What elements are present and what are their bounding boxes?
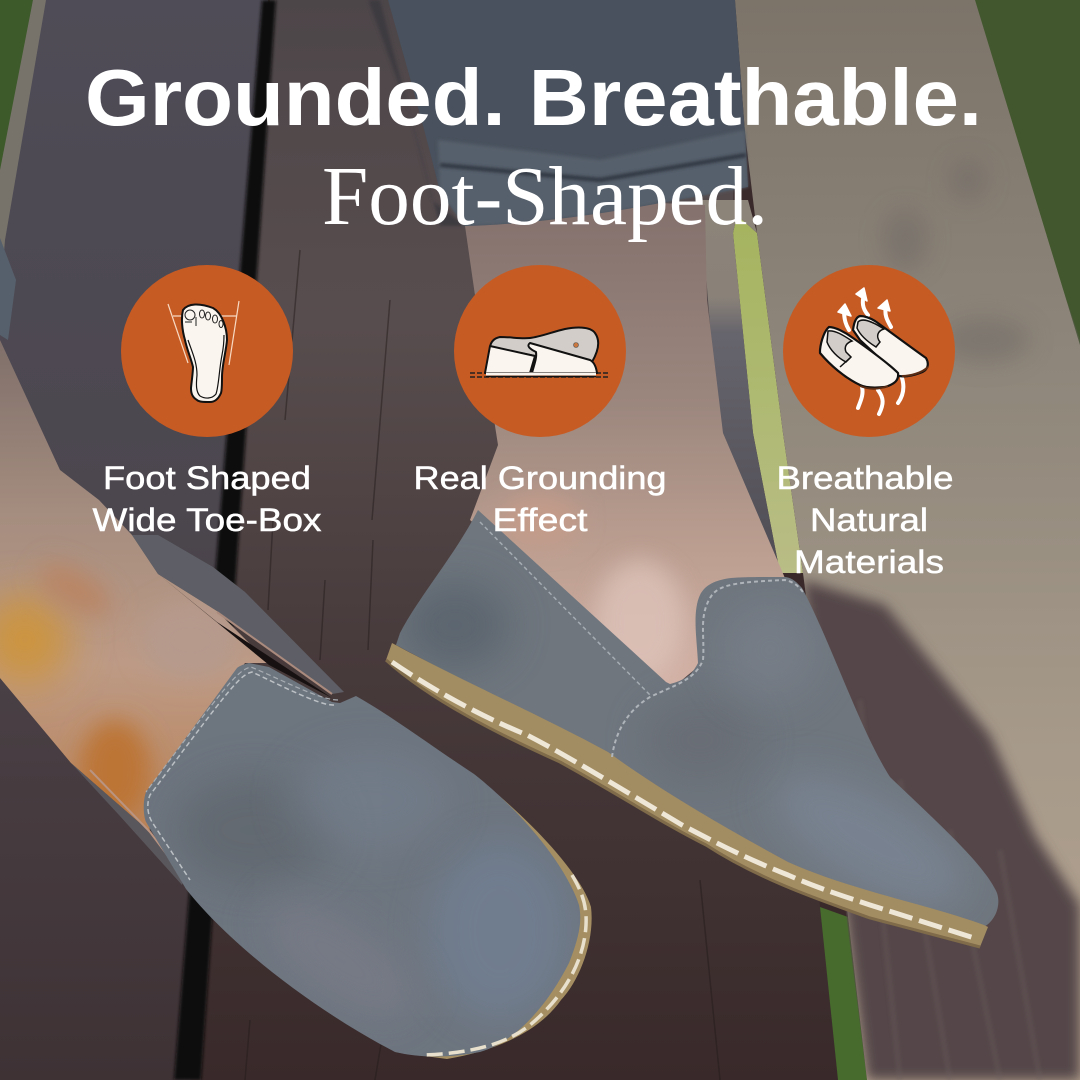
photo: ankle and heel xyxy=(460,200,800,700)
icon: foot shaped wide toe-box xyxy=(121,265,293,437)
label: Breathable Natural Materials: Breathable xyxy=(776,460,954,496)
label: Breathable Natural Materials: Materials xyxy=(794,544,944,580)
photo: left leg xyxy=(0,340,266,830)
label: Foot Shaped Wide Toe-Box: Foot Shaped xyxy=(103,460,311,496)
icon: breathable natural materials xyxy=(783,265,955,437)
label: Real Grounding Effect: Real Grounding xyxy=(414,460,666,496)
icon: real grounding effect xyxy=(454,265,626,437)
subtitle: Foot-Shaped.: Foot-Shaped. xyxy=(322,150,768,243)
photo: right shoe xyxy=(386,510,998,947)
photo: rolled jeans xyxy=(0,0,748,340)
label: Real Grounding Effect: Effect xyxy=(492,502,588,538)
title: Grounded. Breathable.: Grounded. Breathable. xyxy=(85,53,982,142)
label: Breathable Natural Materials: Natural xyxy=(810,502,928,538)
label: Foot Shaped Wide Toe-Box xyxy=(92,460,322,538)
label: Breathable Natural Materials xyxy=(776,460,954,580)
label: Real Grounding Effect xyxy=(414,460,666,538)
photo: left shoe xyxy=(71,535,592,1059)
label: Foot Shaped Wide Toe-Box: Wide Toe-Box xyxy=(92,502,322,538)
